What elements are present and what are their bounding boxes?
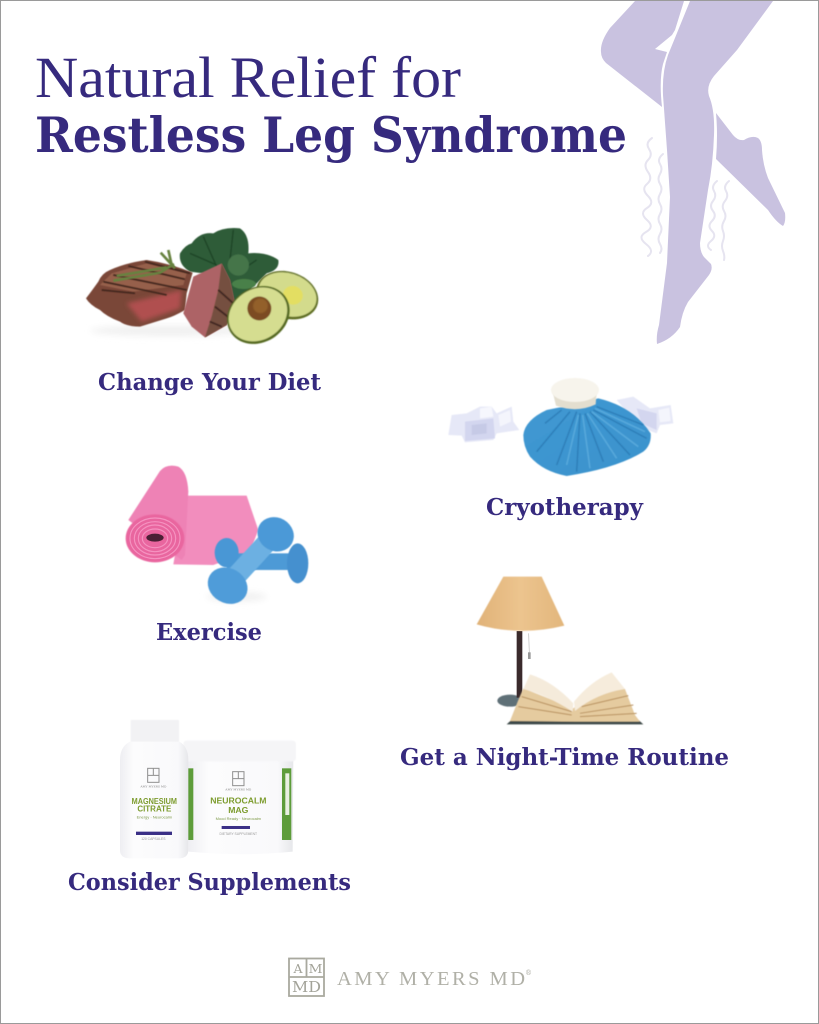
icon: steak, spinach and avocado xyxy=(86,228,325,355)
lamp shade xyxy=(477,577,564,631)
mat xyxy=(173,496,258,565)
logo mark: A xyxy=(292,961,303,976)
bottle: 120 CAPSULES xyxy=(141,837,166,841)
bottle: AMY MYERS MD xyxy=(139,784,167,788)
pack body xyxy=(523,398,651,476)
vibration lines xyxy=(642,138,729,260)
illustration: restless legs xyxy=(601,1,785,344)
bottle xyxy=(120,720,188,858)
jar: DIETARY SUPPLEMENT xyxy=(220,832,257,836)
spinach xyxy=(180,228,278,303)
steak slice xyxy=(183,263,236,337)
jar: Mood Ready · Neurocalm xyxy=(216,816,262,821)
back calf and foot xyxy=(716,113,785,226)
icon: yoga mat and dumbbells xyxy=(126,466,308,611)
logo wordmark: AMY MYERS MD xyxy=(337,968,525,990)
jar: AMY MYERS MD xyxy=(224,788,252,792)
icon: ice pack and ice cubes xyxy=(448,378,673,476)
back thigh xyxy=(601,1,684,107)
back dumbbell xyxy=(215,538,308,583)
back avocado half xyxy=(250,263,325,327)
logo: Amy Myers MD xyxy=(289,958,532,996)
jar: MAG xyxy=(228,805,249,815)
jar xyxy=(183,741,296,854)
label: change your diet: Change Your Diet xyxy=(98,369,321,396)
logo: Amy Myers MD: ® xyxy=(525,969,532,977)
logo mark: M xyxy=(308,961,323,976)
ice cubes xyxy=(448,397,673,442)
icon: supplement bottle and jar xyxy=(120,720,296,858)
front avocado half xyxy=(216,275,300,355)
rosemary xyxy=(113,250,175,281)
title xyxy=(35,45,627,164)
label: consider supplements: Consider Supplements xyxy=(68,869,351,896)
front leg xyxy=(657,1,773,344)
icon: table lamp and open book xyxy=(477,577,643,724)
jar: NEUROCALM xyxy=(210,796,266,806)
logo mark: MD xyxy=(292,980,321,996)
title: Restless Leg Syndrome xyxy=(35,106,627,164)
steak xyxy=(86,260,193,327)
bottle: CITRATE xyxy=(137,805,172,814)
bottle: MAGNESIUM xyxy=(132,797,177,806)
logo mark xyxy=(289,958,324,996)
label: exercise: Exercise xyxy=(156,619,262,646)
bottle: Energy · Neurocalm xyxy=(137,815,173,820)
label: cryotherapy: Cryotherapy xyxy=(486,494,644,521)
title: Natural Relief for xyxy=(35,45,461,110)
label: get a night-time routine: Get a Night-Time Routine xyxy=(400,744,729,771)
book xyxy=(507,672,643,724)
front dumbbell xyxy=(201,511,300,611)
lamp pole xyxy=(517,631,522,698)
pack cap xyxy=(553,392,597,409)
lamp base xyxy=(497,695,523,707)
